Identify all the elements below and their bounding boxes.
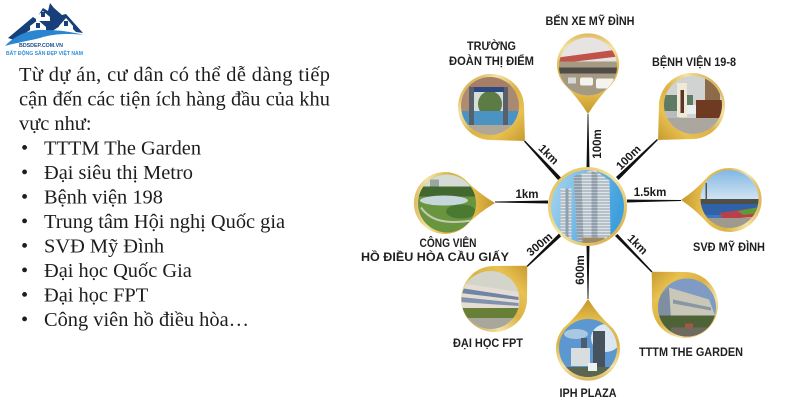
text block: intro and amenities list: •	[21, 236, 28, 258]
logo	[5, 3, 84, 57]
drop marker with photo	[681, 168, 762, 232]
text block: intro and amenities list: Công viên hồ điều hòa…	[44, 309, 249, 331]
text block: intro and amenities list: vực như:	[19, 113, 92, 135]
text block: intro and amenities list: Đại siêu thị Metro	[44, 162, 193, 184]
distance labels	[515, 129, 666, 285]
pin: Công viên hồ điều hòa Cầu Giấy	[361, 172, 509, 264]
label: BỆNH VIỆN 19-8	[652, 54, 736, 69]
text block: intro and amenities list: •	[21, 162, 28, 184]
logo name: BDSDEP.COM.VN	[19, 43, 63, 49]
text block: intro and amenities list: •	[21, 211, 28, 233]
label: TRƯỜNG	[467, 38, 516, 53]
icon: house roofs	[8, 3, 83, 40]
pin: Trường Đoàn Thị Điểm: ĐOÀN THỊ ĐIỂM	[449, 53, 534, 68]
distance labels: 1km	[625, 233, 649, 257]
text block: intro and amenities list	[19, 64, 330, 331]
text block: intro and amenities list: •	[21, 260, 28, 282]
distance labels: 100m	[614, 143, 644, 173]
pin: Đại học FPT	[453, 266, 528, 350]
text block: intro and amenities list: TTTM The Garden	[44, 138, 201, 160]
distance labels: 1km	[536, 143, 560, 167]
text block: intro and amenities list: cận đến các tiện ích hàng đầu của khu	[19, 88, 330, 110]
pin: Trường Đoàn Thị Điểm	[449, 39, 534, 141]
drop marker with photo	[658, 73, 725, 140]
text block: intro and amenities list: SVĐ Mỹ Đình	[44, 236, 164, 258]
icon: wave swoosh	[5, 30, 84, 46]
label: IPH PLAZA	[560, 386, 617, 400]
text block: intro and amenities list: Từ dự án, cư dân có thể dễ dàng tiếp	[19, 64, 330, 86]
pin: SVĐ Mỹ Đình	[681, 168, 765, 254]
distance labels: 600m	[575, 255, 587, 285]
center: apartment towers	[548, 167, 627, 246]
text block: intro and amenities list: Đại học Quốc Gia	[44, 260, 192, 282]
label: SVĐ MỸ ĐÌNH	[693, 239, 765, 254]
distance labels: 300m	[525, 231, 555, 259]
text block: intro and amenities list: •	[21, 138, 28, 160]
drop marker with photo	[556, 299, 621, 381]
drop marker with photo	[557, 33, 619, 114]
logo tagline: BẤT ĐỘNG SẢN ĐẸP VIỆT NAM	[6, 49, 83, 57]
text block: intro and amenities list: •	[21, 284, 28, 306]
pin: Bệnh viện 19-8	[652, 55, 736, 140]
pin: TTTM The Garden	[639, 272, 742, 356]
pin: IPH Plaza	[556, 299, 621, 400]
text block: intro and amenities list: Trung tâm Hội nghị Quốc gia	[44, 211, 285, 233]
pin: Công viên hồ điều hòa Cầu Giấy: HỒ ĐIỀU HÒA CẦU GIẤY	[361, 249, 509, 264]
drop marker with photo	[652, 272, 718, 338]
label: ĐẠI HỌC FPT	[453, 336, 524, 350]
distance labels: 1.5km	[634, 187, 666, 199]
text block: intro and amenities list: •	[21, 186, 28, 208]
distance labels: 100m	[592, 129, 604, 159]
text block: intro and amenities list: Đại học FPT	[44, 284, 149, 306]
label: CÔNG VIÊN	[420, 235, 476, 250]
label: BẾN XE MỸ ĐÌNH	[546, 13, 634, 28]
connector lines	[495, 114, 681, 299]
distance labels: 1km	[515, 189, 539, 201]
drop marker with photo	[458, 74, 525, 141]
pin: Bến xe Mỹ Đình	[546, 13, 634, 114]
drop marker with photo	[461, 266, 528, 332]
label: TTTM THE GARDEN	[639, 345, 743, 359]
text block: intro and amenities list: •	[21, 309, 28, 331]
drop marker with photo	[414, 172, 495, 234]
text block: intro and amenities list: Bệnh viện 198	[44, 186, 163, 208]
